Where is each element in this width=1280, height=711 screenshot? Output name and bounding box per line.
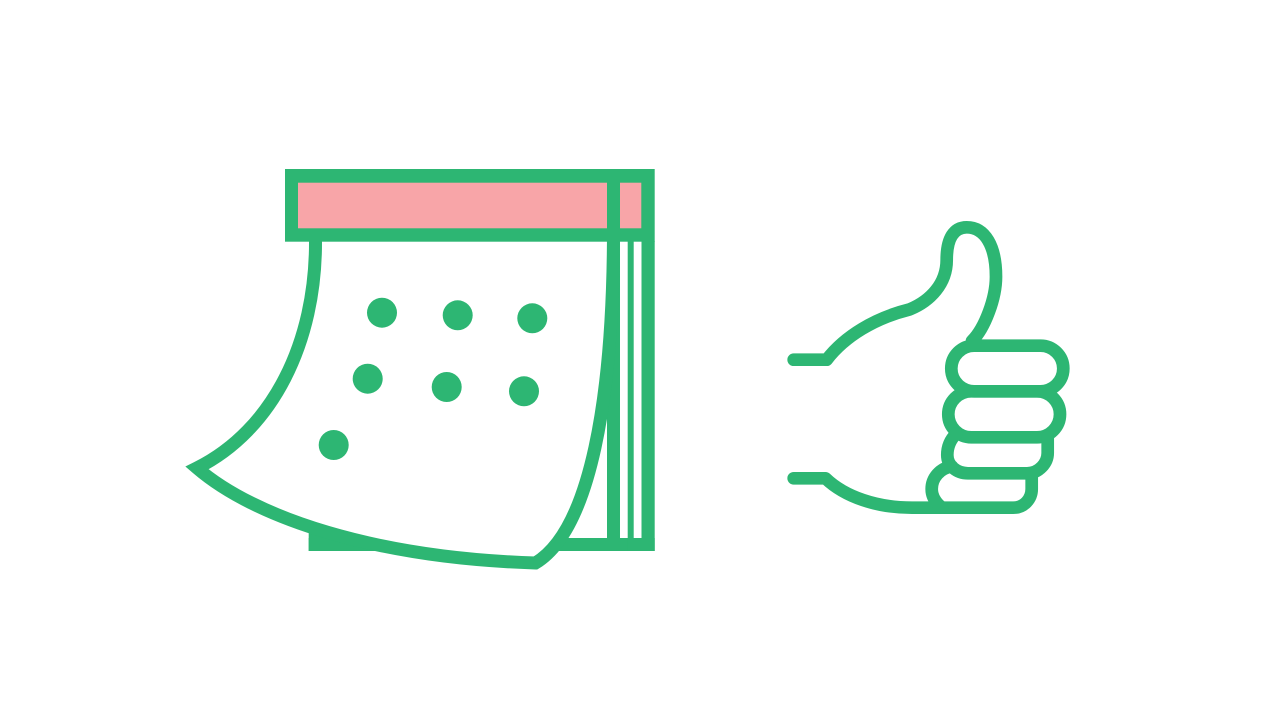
finger four [932, 466, 952, 508]
hand outline with thumb [794, 227, 996, 360]
finger three [947, 434, 1048, 473]
icon: calendar [197, 169, 655, 563]
finger two [948, 391, 1060, 437]
calendar header bar [285, 169, 655, 242]
calendar date dots [319, 298, 547, 460]
icon: thumbs up [794, 227, 1063, 508]
calendar curled page [197, 228, 614, 563]
calendar back pages [309, 241, 655, 551]
finger one [951, 346, 1063, 391]
wrist and lower hand [794, 473, 1032, 508]
